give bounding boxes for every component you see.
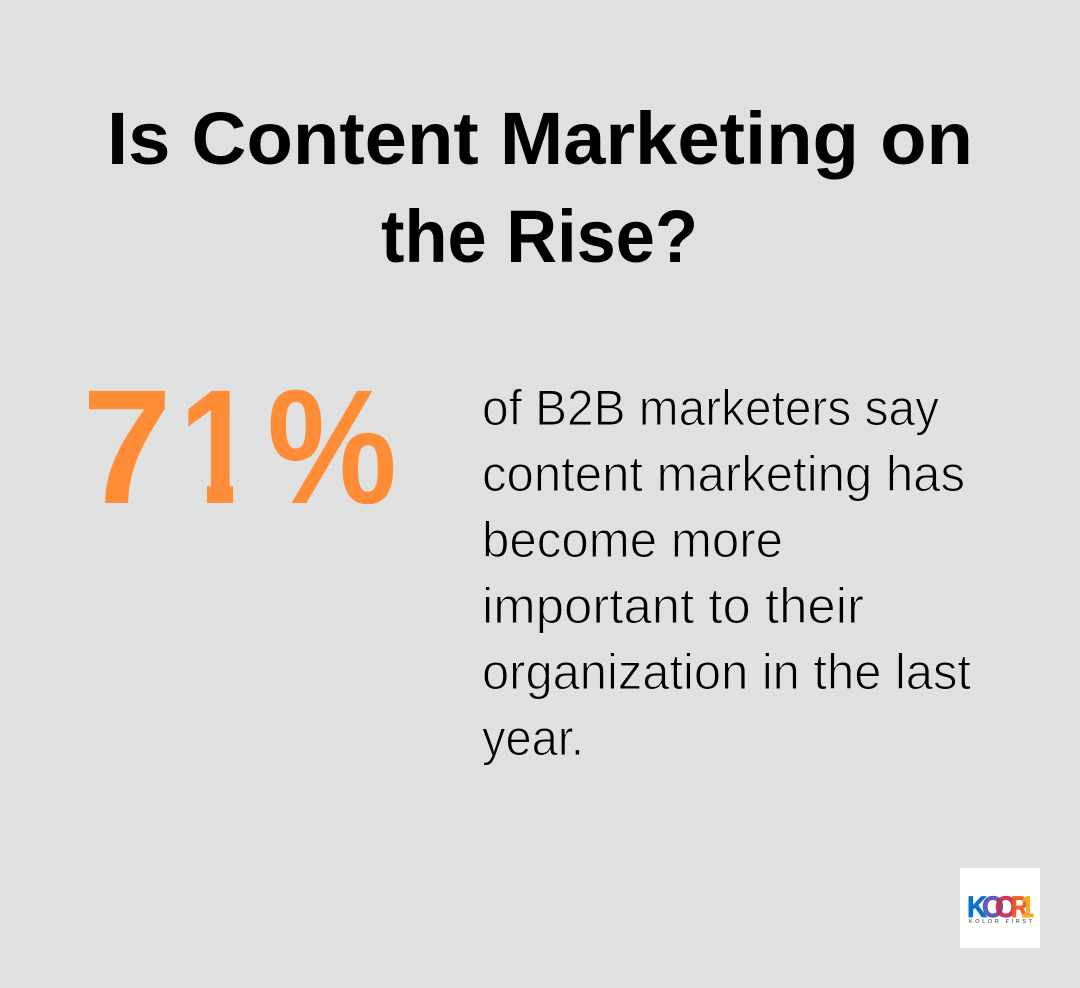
description text xyxy=(482,380,971,766)
logo: KOOR1 Kolor First: R xyxy=(1011,891,1028,924)
logo: KOOR1 Kolor First xyxy=(960,868,1040,948)
title xyxy=(107,97,973,278)
big stat: 71% xyxy=(88,390,394,504)
description text: organization in the last xyxy=(482,644,971,700)
description text: important to their xyxy=(482,578,864,634)
logo: KOOR1 Kolor First: O xyxy=(995,891,1017,924)
description text: content marketing has xyxy=(482,446,965,502)
description text: of B2B marketers say xyxy=(482,380,939,436)
big stat: 71%: % xyxy=(267,355,397,538)
description text: become more xyxy=(482,512,783,568)
description text: year. xyxy=(482,710,584,766)
logo: KOOR1 Kolor First: K xyxy=(967,891,987,924)
logo: KOOR1 Kolor First: O xyxy=(982,891,1004,924)
big stat: 71%: 1 xyxy=(179,355,255,538)
title: the Rise? xyxy=(381,195,698,278)
logo: KOOR1 Kolor First: 1 xyxy=(1021,891,1034,924)
big stat: 71%: 7 xyxy=(82,355,172,538)
logo: KOOR1 Kolor First: KOLOR FIRST xyxy=(969,919,1033,925)
title: Is Content Marketing on xyxy=(107,97,973,180)
